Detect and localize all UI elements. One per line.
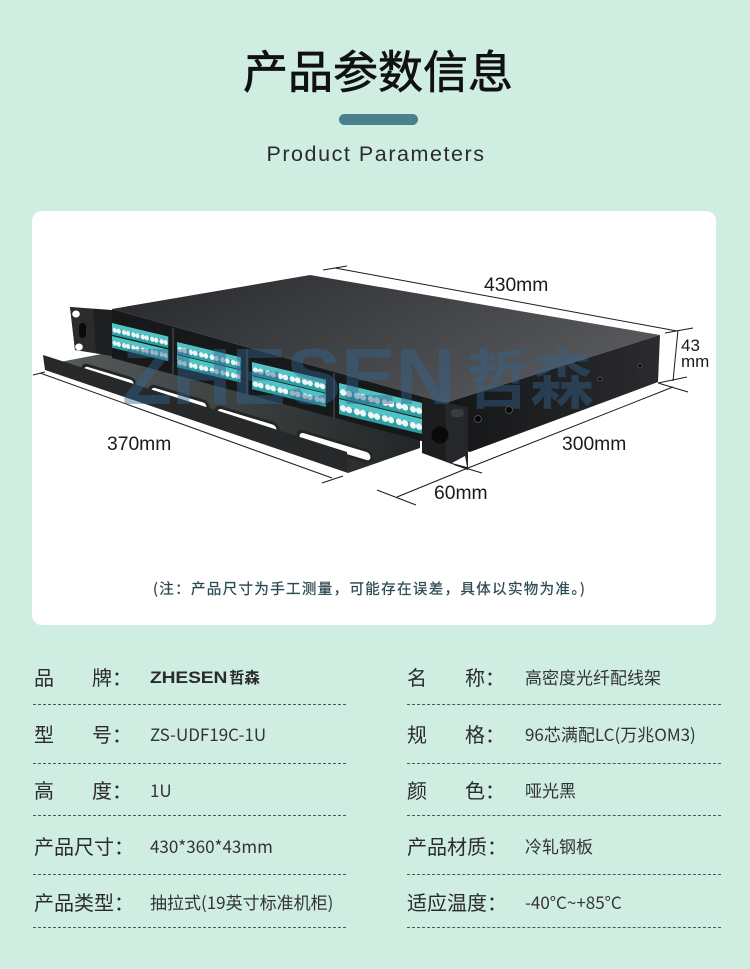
spec row: brand — [34, 662, 260, 691]
panel dividers — [173, 328, 334, 420]
spec row: height: 高 — [34, 775, 54, 804]
spec row: temperature: -40°C~+85°C — [525, 889, 622, 914]
spec row: color: 哑光黑 — [525, 777, 576, 802]
spec row: product size: 产品尺寸： — [34, 831, 134, 860]
chassis top — [112, 275, 660, 403]
spec row: color — [407, 775, 576, 804]
spec row: height: 度： — [92, 775, 132, 804]
spec row: specification: 规 — [407, 719, 427, 748]
spec row: product size — [34, 831, 273, 860]
chassis right side — [445, 335, 660, 452]
side screws — [474, 364, 642, 422]
dimension labels: 300mm — [562, 434, 626, 455]
dimension labels: 370mm — [107, 434, 171, 455]
right rack ear — [422, 398, 468, 470]
spec row: product size: 430*360*43mm — [150, 833, 273, 858]
spec row: specification — [407, 719, 696, 748]
spec row: material: 产品材质： — [407, 831, 507, 860]
spec row: height — [34, 775, 172, 804]
spec row: color: 色： — [465, 775, 505, 804]
dimension labels: mm — [681, 352, 709, 371]
spec row: product type — [34, 887, 333, 916]
spec row: name — [407, 662, 661, 691]
spec row: name: 高密度光纤配线架 — [525, 664, 661, 689]
fiber adapter module 1 — [112, 323, 168, 361]
spec row: color: 颜 — [407, 775, 427, 804]
dimension lines — [33, 266, 693, 505]
dimension labels: 43 — [681, 336, 700, 355]
fiber adapter module 3 — [252, 362, 326, 407]
spec row: model — [34, 719, 266, 748]
title: 产品参数信息 — [243, 36, 513, 101]
spec row: name: 称： — [465, 662, 505, 691]
panel: product image card — [32, 211, 716, 625]
subtitle: Product Parameters — [266, 142, 486, 166]
watermark — [122, 330, 594, 422]
spec row: material: 冷轧钢板 — [525, 833, 593, 858]
measurement note: (注：产品尺寸为手工测量，可能存在误差，具体以实物为准。) — [153, 578, 586, 599]
product diagram with dimensions — [32, 266, 709, 506]
spec row: product type: 抽拉式(19英寸标准机柜) — [150, 889, 333, 914]
spec row: specification: 格： — [465, 719, 505, 748]
spec row: brand: 牌： — [92, 662, 132, 691]
title accent pill — [339, 114, 418, 125]
dimension labels: 430mm — [484, 275, 548, 296]
watermark: 哲森 — [466, 330, 594, 422]
spec row: brand: 品 — [34, 662, 54, 691]
spec row: model: ZS-UDF19C-1U — [150, 721, 266, 746]
spec row: brand: 哲森 — [230, 666, 260, 688]
spec row: name: 名 — [407, 662, 427, 691]
spec row: model: 号： — [92, 719, 132, 748]
fiber adapter module 2 — [177, 342, 241, 383]
spec row: temperature: 适应温度： — [407, 887, 507, 916]
spec row: height: 1U — [150, 777, 172, 802]
dimension labels — [107, 275, 709, 504]
left rack ear — [70, 307, 112, 356]
spec row: temperature — [407, 887, 622, 916]
spec row: model: 型 — [34, 719, 54, 748]
spec row: product type: 产品类型： — [34, 887, 134, 916]
spec row: brand: ZHESEN — [150, 668, 227, 687]
spec row: specification: 96芯满配LC(万兆OM3) — [525, 721, 696, 746]
fiber adapter module 4 — [339, 383, 423, 434]
watermark: ZHESEN — [122, 332, 455, 421]
cable tray — [43, 352, 420, 473]
spec row: material — [407, 831, 593, 860]
chassis front face — [112, 309, 445, 446]
dimension labels: 60mm — [434, 483, 488, 504]
